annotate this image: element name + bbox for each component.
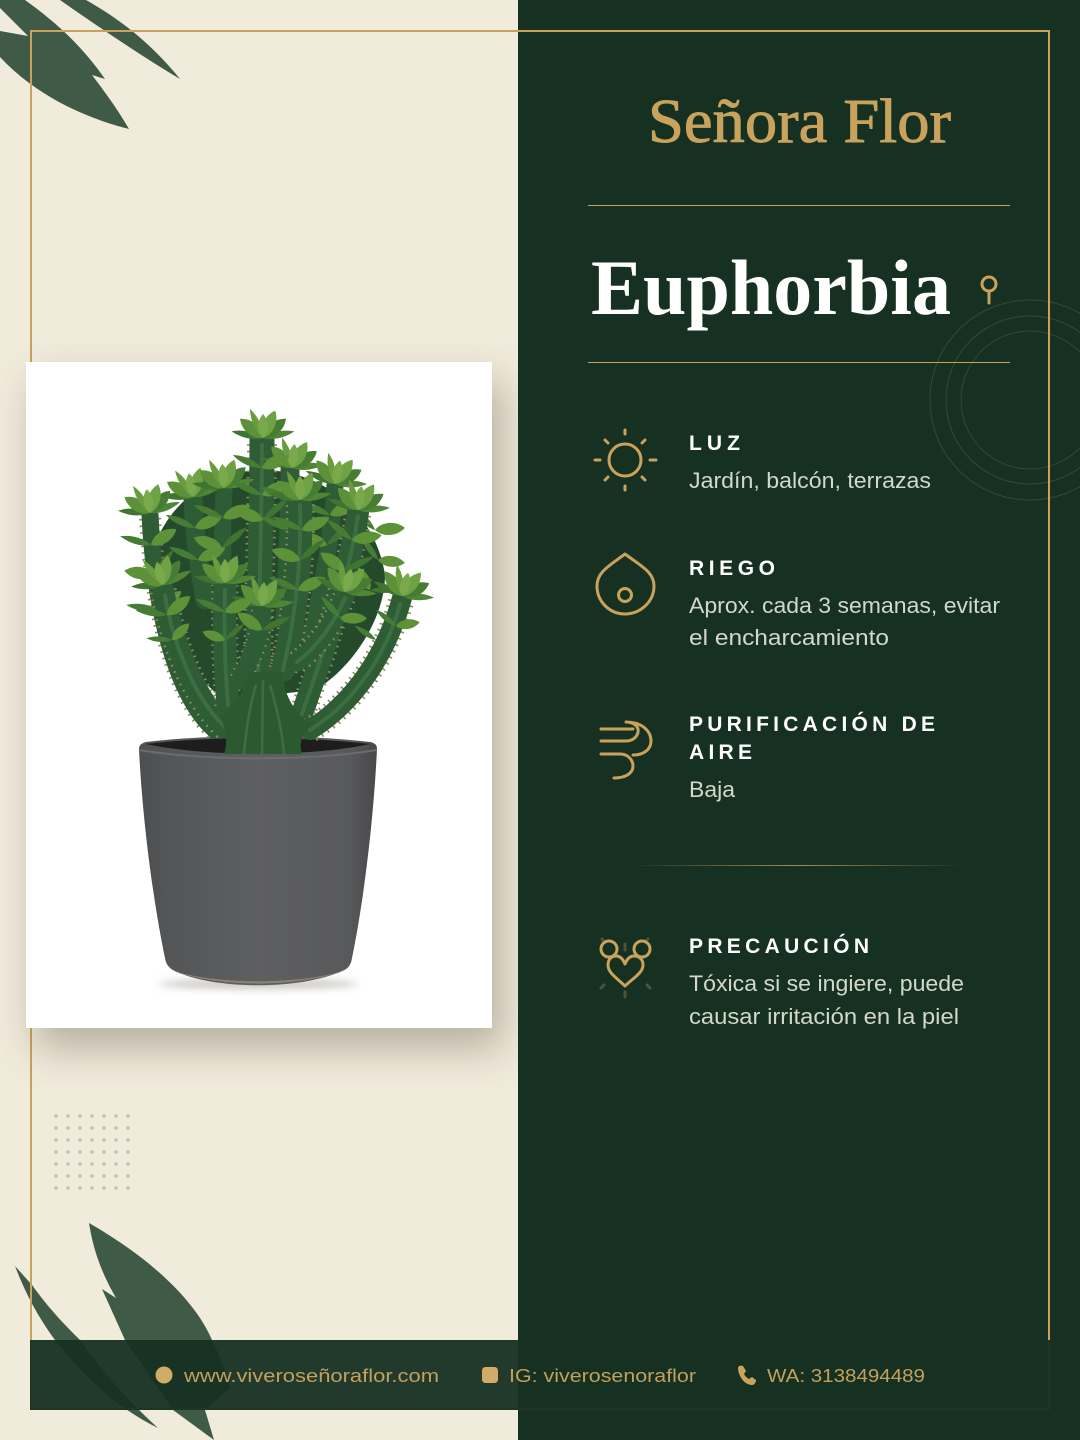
item: precaucion	[689, 934, 964, 1029]
item: purificacion de aire: Baja	[689, 777, 735, 802]
item: luz: LUZ	[689, 432, 740, 455]
euphorbia plant	[114, 407, 441, 754]
dark green panel	[518, 0, 1080, 1440]
divider gradient	[630, 865, 965, 866]
icon: sun	[595, 430, 656, 490]
icon: water drop	[597, 554, 654, 614]
instagram: IG: viverosenoraflor	[509, 1365, 696, 1386]
cream background panel	[0, 0, 518, 1440]
icon: pin	[982, 277, 996, 303]
plant pot	[139, 736, 377, 989]
icon: instagram square	[482, 1367, 498, 1383]
icon: wind	[601, 722, 651, 778]
crown dark mass	[150, 470, 385, 700]
photo card: potted euphorbia	[13, 359, 518, 1071]
leaves: bottom left corner	[15, 1223, 230, 1440]
footer bar	[30, 1340, 1050, 1410]
item: luz: Jardín, balcón, terrazas	[689, 468, 931, 493]
brand title: Señora Flor	[648, 88, 951, 156]
divider top	[588, 205, 1010, 206]
front stems	[114, 469, 441, 730]
dot pattern	[54, 1114, 130, 1190]
item: precaucion: PRECAUCIÓN	[689, 934, 869, 958]
website: www.viveroseñoraflor.com	[183, 1365, 439, 1386]
divider under name	[588, 362, 1010, 363]
item: luz	[689, 432, 931, 493]
item: riego: RIEGO	[689, 557, 775, 580]
item: riego: Aprox. cada 3 semanas, evitar	[689, 593, 1001, 618]
back leaves and stems	[156, 407, 409, 690]
item: purificacion de aire: PURIFICACIÓN DE	[689, 712, 935, 736]
decorative concentric circles	[930, 300, 1080, 500]
trunk	[220, 672, 312, 754]
item: purificacion de aire	[689, 712, 935, 802]
icon: web dot	[156, 1366, 172, 1384]
whatsapp: WA: 3138494489	[767, 1365, 925, 1386]
item: precaucion: causar irritación en la piel	[689, 1004, 959, 1029]
icon: heart caution	[601, 939, 650, 997]
item: purificacion de aire: AIRE	[689, 741, 752, 764]
leaves: top left corner	[0, 0, 180, 129]
item: riego	[689, 557, 1001, 650]
item: riego: el encharcamiento	[689, 625, 889, 650]
item: precaucion: Tóxica si se ingiere, puede	[689, 971, 964, 996]
icon: phone	[738, 1366, 756, 1385]
plant name: Euphorbia	[591, 244, 951, 331]
